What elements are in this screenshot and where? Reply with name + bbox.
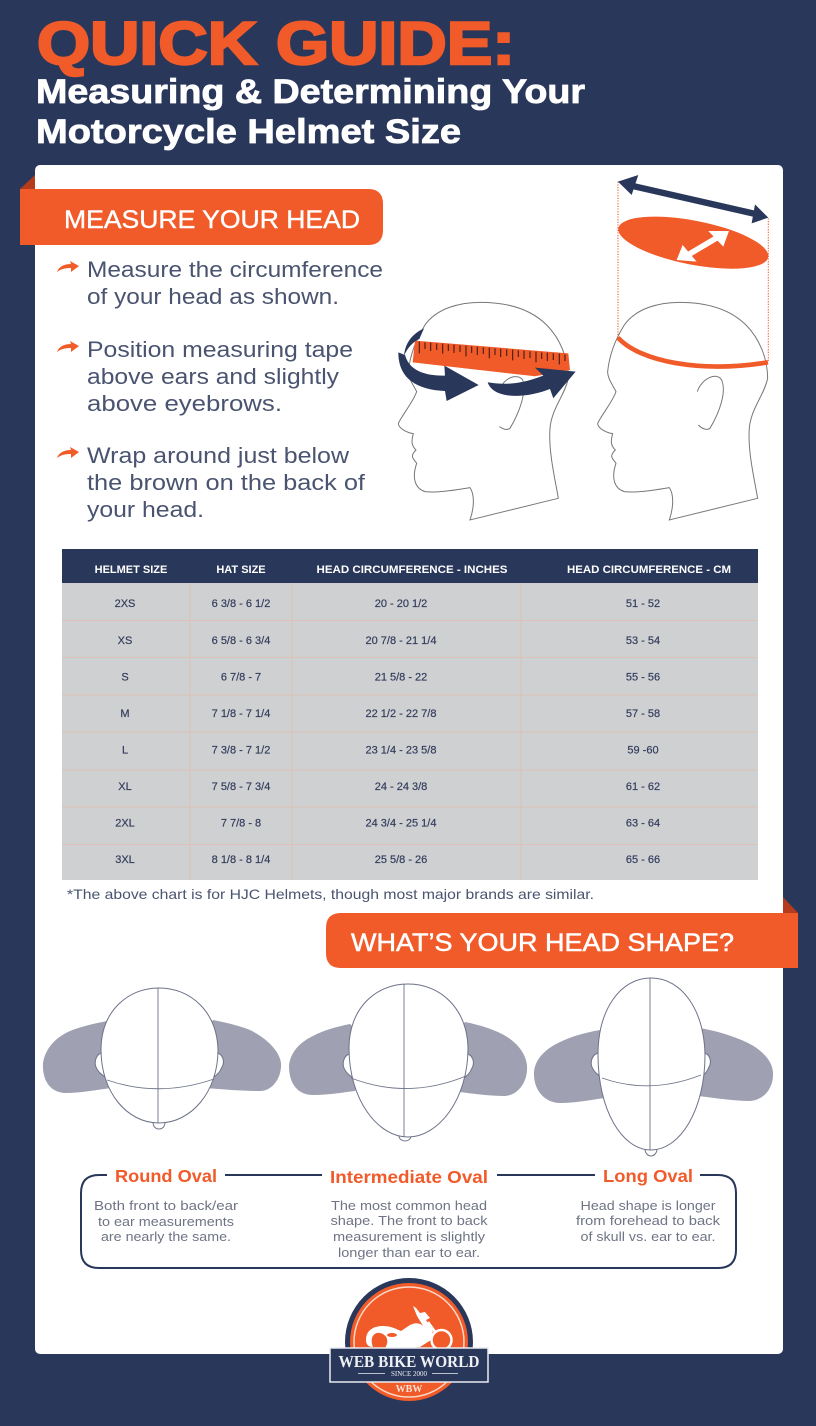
table rows: 20 7/8 - 21 1/4	[366, 635, 436, 647]
text: intermediate oval description: measurement is slightly	[333, 1229, 486, 1244]
label: long oval: Long Oval	[603, 1166, 693, 1186]
headband	[618, 338, 768, 366]
table rows: XL	[118, 781, 132, 793]
table rows: 55 - 56	[626, 672, 660, 684]
table header: HAT SIZE	[216, 564, 266, 576]
title	[36, 10, 585, 151]
table rows: 6 5/8 - 6 3/4	[212, 635, 270, 647]
table header: HEAD CIRCUMFERENCE - CM	[567, 564, 731, 576]
table rows: 6 3/8 - 6 1/2	[212, 598, 270, 610]
title: Motorcycle Helmet Size	[36, 113, 461, 151]
table rows: 8 1/8 - 8 1/4	[212, 854, 270, 866]
table rows: 7 7/8 - 8	[221, 818, 261, 830]
oval	[614, 207, 772, 279]
table rows: 7 5/8 - 7 3/4	[212, 781, 270, 793]
panel: white card	[35, 165, 783, 1354]
illustration: round oval head	[43, 988, 281, 1129]
text: step 1	[87, 257, 383, 309]
text: intermediate oval description: longer than ear to ear.	[338, 1245, 480, 1260]
table rows: 2XS	[115, 598, 135, 610]
text: intermediate oval description	[330, 1198, 488, 1260]
icon: arrow 1	[57, 261, 79, 272]
footnote: *The above chart is for HJC Helmets, though most major brands are similar.	[67, 886, 594, 902]
icon: motorcycle	[366, 1306, 452, 1350]
table rows: 3XL	[115, 854, 135, 866]
table header: HELMET SIZE	[95, 564, 167, 576]
text: step 2: above ears and slightly	[87, 364, 340, 389]
illustration: head with measuring tape	[398, 302, 576, 520]
table rows: 25 5/8 - 26	[375, 854, 427, 866]
text: long oval description: of skull vs. ear to ear.	[580, 1229, 716, 1244]
dark double arrow	[628, 185, 760, 215]
table rows: 59 -60	[627, 744, 659, 756]
table rows: 7 3/8 - 7 1/2	[212, 744, 270, 756]
table rows: XS	[118, 635, 132, 647]
text: step 3: Wrap around just below	[87, 443, 350, 468]
instructions	[57, 257, 383, 522]
text: long oval description	[576, 1198, 721, 1244]
banner: head shape: WHAT’S YOUR HEAD SHAPE?	[351, 929, 734, 957]
text: intermediate oval description: shape. The front to back	[330, 1213, 488, 1228]
text: round oval description: to ear measurements	[98, 1214, 235, 1229]
table rows: 53 - 54	[626, 635, 660, 647]
table rows: 51 - 52	[626, 598, 660, 610]
text: step 2: Position measuring tape	[87, 337, 353, 362]
illustration: intermediate oval head	[289, 984, 527, 1141]
title: Measuring & Determining Your	[36, 73, 585, 111]
table rows: 23 1/4 - 23 5/8	[366, 744, 436, 756]
text: long oval description: Head shape is longer	[580, 1198, 716, 1213]
text: step 3	[87, 443, 366, 522]
table rows: 63 - 64	[626, 818, 660, 830]
banner: measure your head	[20, 175, 383, 245]
title: QUICK GUIDE:	[37, 10, 515, 77]
text: step 2	[87, 337, 353, 416]
table rows: 24 3/4 - 25 1/4	[366, 818, 436, 830]
banner: measure your head: MEASURE YOUR HEAD	[64, 206, 360, 234]
table rows	[115, 598, 660, 866]
table rows: 20 - 20 1/2	[375, 598, 427, 610]
table header: HEAD CIRCUMFERENCE - INCHES	[316, 564, 508, 576]
text: round oval description: Both front to back/ear	[94, 1198, 239, 1213]
table rows: 2XL	[115, 818, 135, 830]
measuring tape	[413, 341, 570, 376]
white double arrow	[685, 235, 722, 257]
text: round oval description: are nearly the same.	[101, 1229, 231, 1244]
table rows: L	[122, 744, 128, 756]
table rows: 22 1/2 - 22 7/8	[366, 708, 436, 720]
illustration: head with oval measurement	[598, 175, 772, 520]
text: intermediate oval description: The most common head	[331, 1198, 487, 1213]
text: step 1: Measure the circumference	[87, 257, 383, 282]
table rows: 24 - 24 3/8	[375, 781, 427, 793]
logo banner: WEB BIKE WORLD	[338, 1352, 480, 1371]
text: step 1: of your head as shown.	[87, 284, 339, 309]
illustration: long oval head	[534, 978, 773, 1156]
text: step 2: above eyebrows.	[87, 391, 282, 416]
label: round oval: Round Oval	[115, 1166, 217, 1186]
text: step 3: the brown on the back of	[87, 470, 366, 495]
logo banner: SINCE 2000	[391, 1370, 427, 1378]
logo banner	[330, 1348, 488, 1382]
panel: head shape descriptions	[81, 1166, 736, 1268]
text: step 3: your head.	[87, 497, 204, 522]
table rows: 61 - 62	[626, 781, 660, 793]
table: helmet size chart	[62, 549, 758, 880]
table header	[95, 564, 731, 576]
table rows: S	[121, 672, 129, 684]
icon: arrow 2	[57, 341, 79, 352]
table rows: M	[120, 708, 130, 720]
banner: head shape	[326, 897, 798, 968]
label: intermediate oval: Intermediate Oval	[330, 1167, 488, 1187]
text: round oval description	[94, 1198, 239, 1244]
table rows: 57 - 58	[626, 708, 660, 720]
table rows: 21 5/8 - 22	[375, 672, 427, 684]
table rows: 6 7/8 - 7	[221, 672, 261, 684]
icon: arrow 3	[57, 447, 79, 458]
table rows: 7 1/8 - 7 1/4	[212, 708, 270, 720]
arrows around head	[398, 328, 576, 401]
dotted guide lines	[618, 182, 768, 362]
table rows: 65 - 66	[626, 854, 660, 866]
logo initials: WBW	[396, 1384, 422, 1395]
logo: web bike world	[330, 1278, 488, 1406]
text: long oval description: from forehead to back	[576, 1213, 721, 1228]
